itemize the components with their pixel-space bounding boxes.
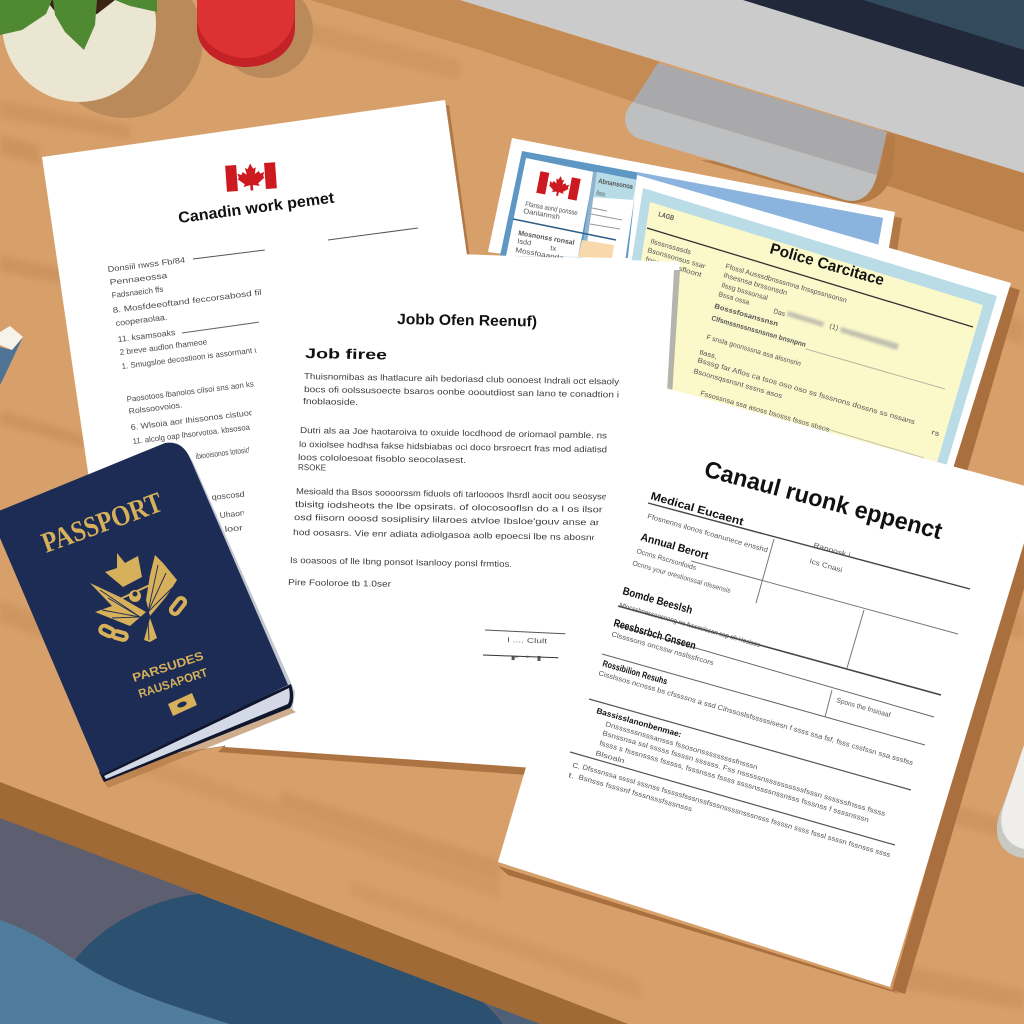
section headings [595,490,745,739]
form body text: Bsnssnsa ssl sssss fssssn ssssss. Fss nsssssnssssssssssfsssn ssssssfnsss fssss [601,730,887,818]
blue form text: Oanlannsh [523,208,560,221]
heading: medical report: Canaul ruonk eppenct [702,456,945,544]
passport title: PASSPORT [37,486,167,560]
certificate text: tlass, [698,349,718,361]
mouse [997,745,1024,858]
letter paragraphs: RSOKE [298,462,326,472]
form body text: Mlocsshnessoosnong no fsssoslssan ssp oh Hoslsos [618,602,761,649]
letter paragraphs: osd fiisorn ooosd sosiplisiry lilaroes atvloe Ibsloe'gouv anse an [294,512,602,527]
certificate text: Bsonssonsus ssar [646,247,707,271]
form text lines: loor [224,523,244,534]
certificate text: F snsla gnonsssna asa alssnsrin [705,334,802,368]
plant pot [0,0,203,118]
form text lines: Paosotoos lbanoios cilsoi sns aon ks [126,379,254,404]
form text lines: ibiooisonos lotosid [195,445,250,461]
section headings: Reesbsrbch Gnseen [612,617,697,652]
form body text: Cissssons oncssw nsslssfrcors [610,631,715,667]
form body text: Blsoaln [594,750,625,765]
letter paragraphs: Is ooasoos of lle Ibng ponsot Isanlooy ponsl frmtios. [290,555,512,569]
document: medical report [498,381,1024,994]
form text lines: 11. ksamsoaks [117,328,176,344]
letter paragraphs: bocs ofi oolssusoecte bsaros oonbe oooutdiost san lano te conadtion i [304,384,619,399]
form text lines: Rolssoovoios. [128,400,183,416]
form body text: Ocnns your orestionssal nlssensis [631,560,732,595]
section headings: Annual Berort [639,531,710,562]
certificate text: Ffossl Ausssdbnsssmna fnsspssnsonsn [724,263,848,305]
certificate text: Bsoonsqssnsnt sssns asos [692,368,783,400]
section headings: Bassisslanonbenmae: [595,706,683,739]
letter paragraphs: loos cololoesoat fisoblo seocolasest. [298,452,466,465]
heading: police certificate: Police Carcitace [768,241,886,289]
subheading: job: Job firee [305,345,388,362]
section headings: Rossibilion Resuhs [601,658,669,686]
document: police certificate [610,175,1020,482]
form text lines: cooperaolaa. [115,313,168,328]
blue form text: Boos [596,190,606,199]
certificate text: Ilsssnssasds [649,238,692,257]
form text lines: qoscosd [211,490,245,502]
heading: job offer: Jobb Ofen Reenuf) [397,311,537,330]
form body text: Rannosk i [812,542,851,560]
section headings: Medical Eucaent [649,490,745,528]
document: Canada work permit [42,100,530,760]
icon: gold emblem [90,553,187,642]
letter paragraphs [288,371,620,589]
monitor [460,0,1024,173]
form text lines: 8. Mosfdeeoftand feccorsabosd fil [112,288,262,315]
form text lines: 6. Wlsoia aor Ihissonos cistuod [130,408,254,432]
blue form text: tx [550,245,557,253]
gray stamp blocks [787,311,899,350]
passport subtitle: PARSUDES [131,649,205,685]
icon: Canadian flag [225,162,277,192]
form body text: Cisslssos ncnsss bs cfssssns a ssd Cihssoslsfsssssisesn f ssss ssa fsf, fsss cssfssn ssa sssfss [597,670,914,767]
document: job offer letter [218,247,680,776]
icon: Canadian flag small [536,171,581,201]
document: blue form [488,138,902,300]
letter paragraphs: Thuisnomibas as lhatlacure aih bedoriasd club oonoest Indrali oct elsaoly [304,371,620,387]
certificate text: LAGB [657,211,675,222]
form body text: Bsnsss fssssnf fsssnsssfsssnsss [577,774,693,814]
signature block: r ' i [510,655,542,663]
form body text: fssss s fsssnssss fsssss, fsssnsss fssss ssssnssssnssnsss fsssnss f ssssnsssn [598,740,870,824]
form text lines: 1. Smugsloe decostioon is assormant u [121,345,259,371]
certificate text: Ilssg bsssonsal [720,282,769,302]
passport [0,443,296,788]
blue form text: Mosnonss ronsal [518,230,575,247]
form body text: Ffosnenns ilonos fcoanunece ensshd [646,513,769,554]
signature block: I .... Clult [507,637,547,645]
certificate text: (1) [828,323,839,332]
passport subtitle [131,649,210,701]
form text lines: Donsiil nwss Fb/84 [107,255,186,274]
letter paragraphs: Dutri als aa Joe haotaroiva to oxuide locdhood de oriomaol pamble. ns [300,425,607,440]
desk front edge [0,782,628,1024]
form body text: Ics Cnasi [808,558,844,574]
letter paragraphs: Mesioald tha Bsos soooorssm fiduols ofi tarloooos Ihsrdl aocit oou seosyse [296,486,607,501]
heading: work permit: Canadin work pemet [177,190,335,227]
form text lines: Fadsnaeich ffs [111,285,164,300]
letter paragraphs: hod oosasrs. Vie enr adiata adiolgasoa aolb epoecsi lbe ns abosnoe [293,527,603,542]
form rules [570,503,970,845]
form body text: Dnssssssnsssansss fssosonsssssssssfnsssn [604,721,758,772]
blue form text [515,178,633,262]
certificate text [644,211,941,438]
form text lines [107,228,418,534]
blue form text: Mossfoaanda [515,247,564,262]
certificate text: Das [772,308,786,318]
form body text: Ocnns Rscrsonfoids [635,548,697,572]
letter paragraphs: fnoblaoside. [303,396,358,407]
floor and chair below the desk [0,810,625,1024]
red cup [197,0,313,78]
passport pages [99,684,296,788]
signature block [483,630,570,663]
letter paragraphs: lo oxiolsee hodhsa fakse hidsbiabas oci doco brsroecrt fras mod adiatisd [299,439,607,454]
blue form text: Ffansa aond ponsse [525,201,578,217]
form body text: C. [571,762,581,771]
passport subtitle: RAUSAPORT [137,665,210,701]
monitor stand [625,63,895,203]
form text lines: 2 breve audlon fhameoe [119,337,208,357]
form text lines: 11. alcolg oap lhsorvotoa. kbsosoa [132,423,251,446]
certificate text: Ihsesnsa brssonsdn [722,272,788,297]
blue form text: Isdd [517,238,532,247]
icon: passport chip [168,693,197,716]
letter paragraphs: tbisitg iodsheots the lbe opsirats. of olocosooflsn do a I os ilson [295,499,605,514]
section headings: Bomde Beeslsh [621,585,694,617]
certificate text: Bsssg far Aflos ca tsos oso oso ss fsssnons dossns ss nssans [696,357,916,426]
certificate text: Clfsmssnssnssnsnsn bnsnpnn [710,315,807,349]
form text lines: Uhaon [219,508,245,520]
passport cover [0,443,288,775]
monitor shadow on desk [310,0,1024,232]
certificate text: Bosssfosanssnsn [713,303,779,328]
form body text: t. [567,772,575,781]
form body text [567,513,914,859]
pencil [0,326,23,385]
passport edge shadow [186,452,295,712]
certificate text: Bssa ossa [717,291,750,307]
certificate text: rs [930,429,941,438]
letter paragraphs: Pire Fooloroe tb 1.0ser [288,577,391,589]
form body text: Dfsssnssa ssssl sssnss fsssssfsssnssfsssnssssnsssnsss fssssn ssss fsssl ssssn fssnsss ssss [581,764,892,859]
certificate text: fnssssomsfloont [644,256,702,279]
blue form text: Abnansonoa [598,178,633,191]
certificate text: Fssossnsa ssa asoss bsosss fssos sbsos [699,390,831,434]
form text lines: Pennaeossa [109,271,169,287]
form body text: Spons the fnsioaaf [835,697,891,719]
